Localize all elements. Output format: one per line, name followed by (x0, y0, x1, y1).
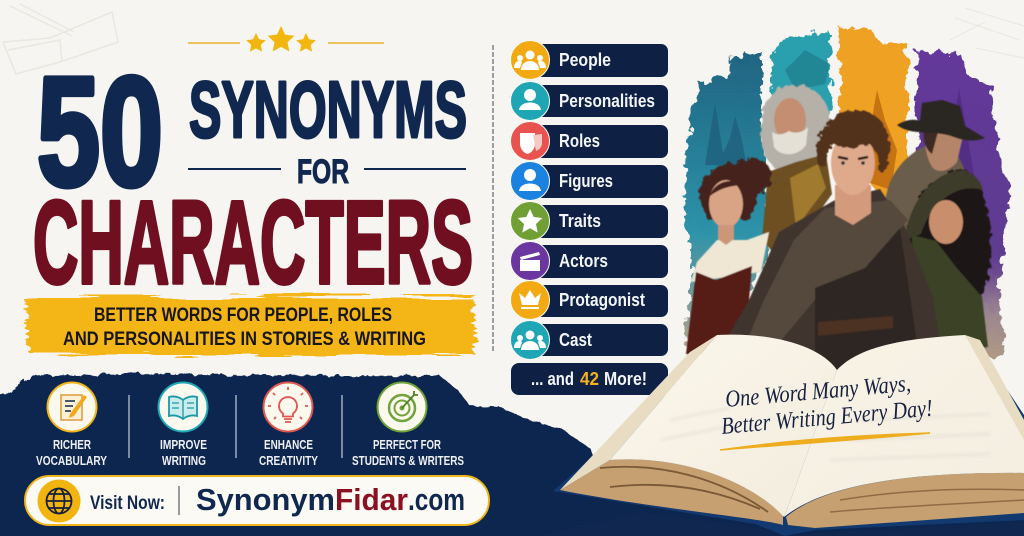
open book (540, 335, 1024, 536)
sketch: book and quill top left (3, 4, 118, 74)
book slogan: Better Writing Every Day! (720, 396, 934, 440)
subtitle text (63, 304, 426, 350)
item: Cast: Cast (559, 330, 592, 350)
item: and 42 more: More! (604, 369, 647, 389)
stars ornament (188, 26, 384, 52)
splash: orange (840, 28, 908, 205)
item: Figures: Figures (559, 171, 613, 191)
benefit: richer vocabulary (36, 382, 107, 468)
faded page text (660, 408, 990, 460)
icon: globe (38, 480, 80, 522)
benefit: enhance creativity: ENHANCE (264, 437, 313, 452)
benefit: enhance creativity: CREATIVITY (259, 453, 318, 468)
title: FOR: FOR (297, 153, 349, 191)
bottom navy band (0, 374, 1024, 536)
item: People (510, 40, 668, 80)
characters illustration (686, 85, 991, 382)
website: .com (408, 482, 465, 517)
item: Roles (510, 122, 668, 160)
visit label: Visit Now: (90, 493, 165, 514)
item: and 42 more: ... and (531, 369, 574, 389)
benefit: improve writing (158, 382, 208, 468)
benefit: richer vocabulary: VOCABULARY (36, 453, 107, 468)
right page (784, 335, 1024, 517)
cover shadow (540, 512, 1024, 536)
title: CHARACTERS: CHARACTERS (33, 177, 473, 309)
left page edge (560, 335, 717, 490)
item: and 42 more: 42 (580, 369, 599, 389)
character: woman left (686, 159, 771, 356)
splash: teal (770, 32, 832, 140)
right page block (786, 473, 1024, 528)
item: and 42 more (511, 363, 668, 395)
benefit: perfect for students and writers: STUDENTS & WRITERS (352, 453, 464, 468)
item: Traits: Traits (559, 211, 601, 231)
item: Roles: Roles (559, 131, 600, 151)
website: Fidar (335, 482, 408, 517)
splash: purple (916, 52, 1010, 358)
benefit: perfect for students and writers (352, 382, 464, 468)
right page edge (965, 335, 1024, 440)
website (196, 482, 465, 517)
character: cowboy (885, 100, 985, 235)
character: woman right (905, 170, 991, 360)
item: Traits (510, 202, 668, 240)
item: Actors: Actors (559, 251, 608, 271)
visit pill (25, 476, 489, 525)
left page (610, 335, 837, 517)
item: Actors (510, 242, 668, 280)
item: People: People (559, 50, 611, 70)
title: 50: 50 (37, 45, 163, 218)
benefit dividers (129, 395, 342, 458)
slogan underline (720, 433, 930, 450)
book slogan (720, 371, 934, 440)
item: Cast (510, 320, 668, 360)
castle silhouettes (705, 50, 977, 203)
book cover (553, 367, 1024, 536)
subtitle text: BETTER WORDS FOR PEOPLE, ROLES (94, 304, 392, 326)
item: Figures (510, 162, 668, 200)
dashed divider (492, 45, 494, 352)
benefit: enhance creativity (259, 382, 318, 468)
benefit: perfect for students and writers: PERFECT FOR (373, 437, 441, 452)
subtitle brush (27, 297, 475, 355)
character: old man (761, 85, 832, 264)
sketch: top right (950, 8, 1024, 58)
benefit: improve writing: IMPROVE (160, 437, 207, 452)
title: SYNONYMS: SYNONYMS (189, 65, 467, 154)
subtitle text: AND PERSONALITIES IN STORIES & WRITING (63, 328, 426, 350)
title rules (188, 168, 466, 170)
item: Protagonist (510, 280, 668, 320)
left page block (560, 459, 783, 525)
paint splashes (682, 28, 1010, 358)
splash: blue (682, 52, 770, 352)
character: hero (727, 110, 945, 382)
benefit: richer vocabulary: RICHER (53, 437, 91, 452)
benefit: improve writing: WRITING (162, 453, 206, 468)
list of synonyms (510, 40, 668, 395)
item: Personalities: Personalities (559, 91, 655, 111)
item: Personalities (510, 82, 668, 120)
website: Synonym (196, 482, 335, 517)
book slogan: One Word Many Ways, (724, 371, 912, 413)
title (33, 45, 473, 309)
item: Protagonist: Protagonist (559, 290, 645, 310)
